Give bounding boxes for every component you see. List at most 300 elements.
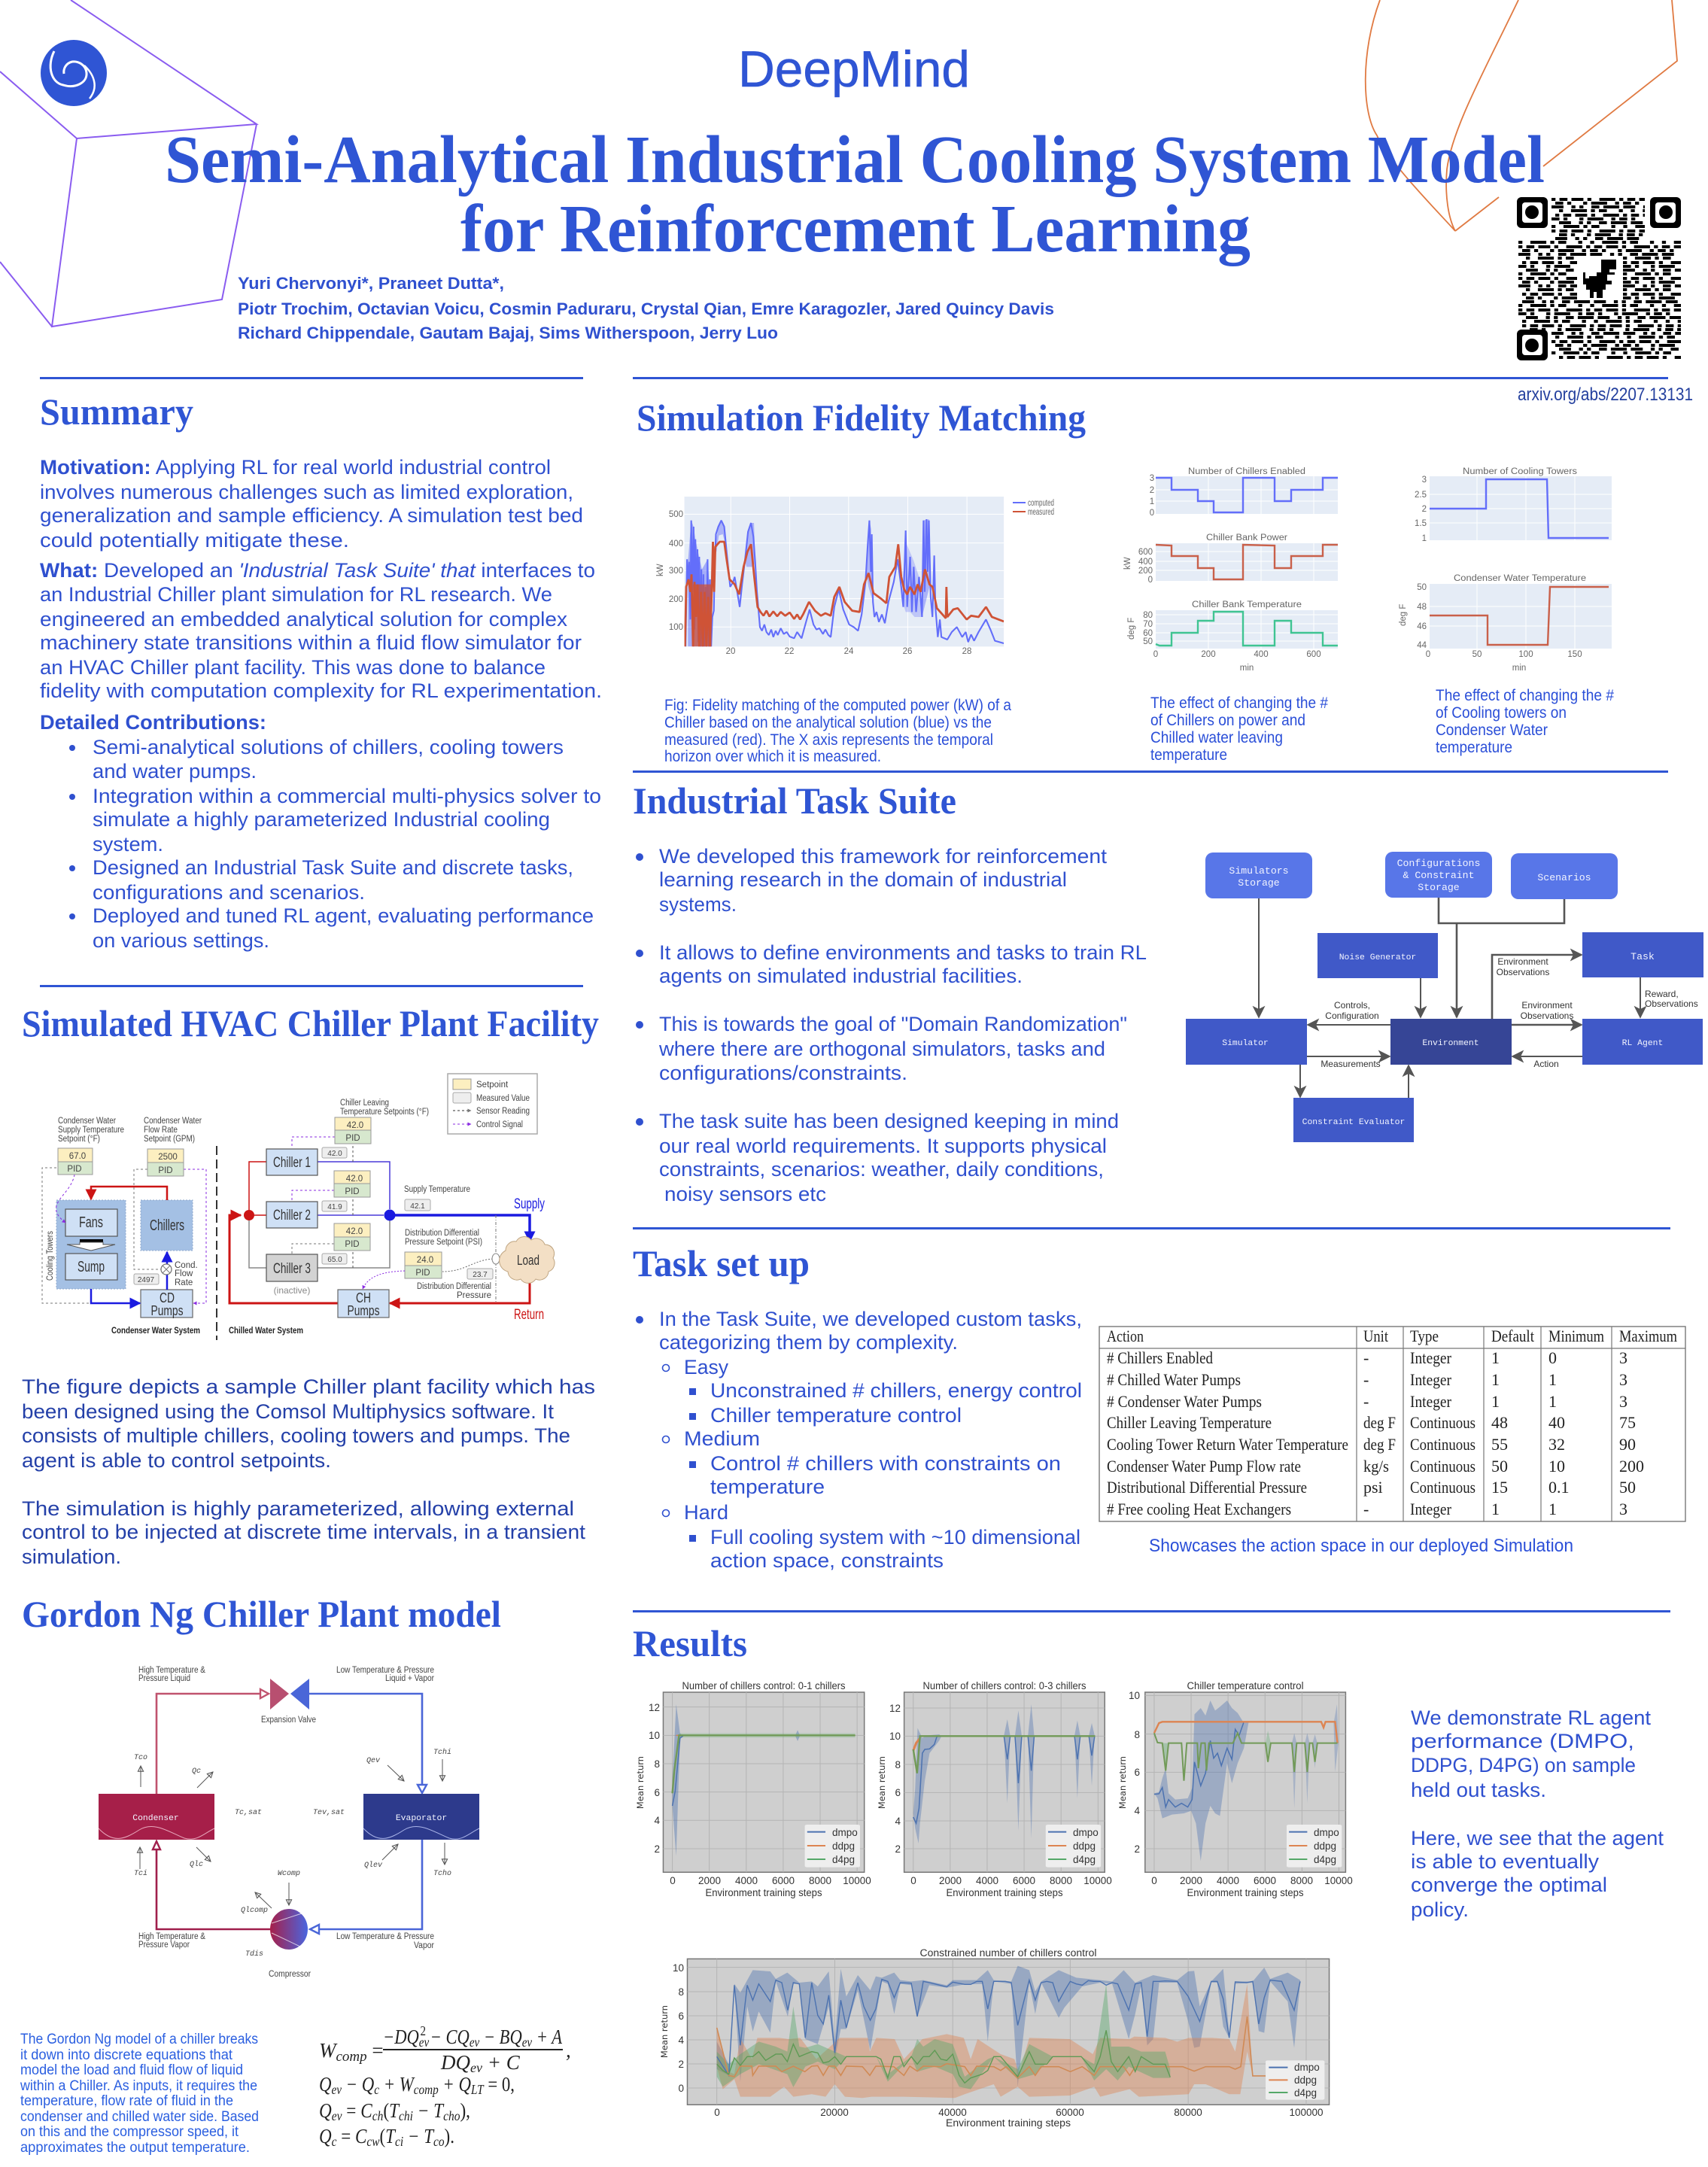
diagram: refrigeration cycle: Tdis	[245, 1950, 263, 1959]
chart: chiller bank temperature: 60	[1143, 629, 1153, 638]
caption: cooling towers effect: Condenser Water	[1436, 722, 1548, 739]
table: action space: # Free cooling Heat Exchangers	[1107, 1500, 1291, 1518]
condenser water system: Setpoint (°F)	[58, 1135, 100, 1144]
chart: constrained number of chillers control: 0	[714, 2107, 720, 2118]
Gordon Ng description: The Gordon Ng model of a chiller breaks	[20, 2032, 258, 2047]
table: action space: 48	[1491, 1413, 1508, 1432]
caption: fidelity chart: horizon over which it is measured.	[664, 748, 881, 765]
equations: cho	[443, 2108, 460, 2123]
table: action space: 1	[1491, 1500, 1500, 1518]
diagram: task suite architecture: Environment	[1422, 1039, 1479, 1048]
chart: chiller bank temperature: 80	[1143, 611, 1153, 620]
chart: chillers control 0-3: 10000	[1083, 1875, 1112, 1886]
equations: 2	[420, 2023, 426, 2038]
decorative purple cube outline	[0, 0, 257, 327]
chart: condenser water temperature: 48	[1417, 603, 1427, 612]
caption: cooling towers effect: of Cooling towers on	[1436, 704, 1567, 722]
chart: computed vs measured power: 26	[903, 647, 912, 656]
table: action space: Integer	[1410, 1348, 1452, 1367]
chilled water system: PID	[415, 1269, 430, 1278]
chart: constrained number of chillers control: 100000	[1289, 2107, 1324, 2118]
table: action space: 40	[1548, 1413, 1565, 1432]
task list: Easy	[684, 1356, 728, 1378]
table: action space: 3	[1619, 1392, 1627, 1411]
condenser water system: PID	[158, 1166, 173, 1175]
chart: chillers control 0-1: 8000	[809, 1875, 831, 1886]
equations: ev	[419, 2035, 429, 2050]
task list: Unconstrained # chillers, energy control	[710, 1379, 1082, 1402]
chiller facility description: control to be injected at discrete time intervals, in a transient	[22, 1521, 586, 1543]
table: action space: kg/s	[1363, 1457, 1389, 1476]
chart: chiller temperature control: 6000	[1254, 1875, 1276, 1886]
chart: chiller bank temperature: 400	[1254, 650, 1269, 659]
chart: chillers control 0-3: 8000	[1050, 1875, 1072, 1886]
chiller facility description: agent is able to control setpoints.	[22, 1449, 331, 1472]
chart: chiller temperature control: 2	[1134, 1843, 1140, 1855]
chart: condenser water temperature: deg F	[1399, 604, 1408, 626]
diagram: refrigeration cycle: Tci	[134, 1869, 147, 1878]
panel: industrial task suite	[633, 770, 1703, 1205]
chilled water system: 42.0	[346, 1227, 363, 1236]
heading: Simulated HVAC: Simulated HVAC Chiller Plant Facility	[22, 1002, 599, 1044]
chart: chillers control 0-1: 2	[654, 1843, 660, 1855]
chart: chillers control 0-1: 12	[649, 1702, 660, 1713]
results description: is able to eventually	[1411, 1850, 1600, 1873]
chart: chiller temperature control: d4pg	[1314, 1854, 1336, 1865]
chilled water system: 24.0	[417, 1256, 433, 1265]
table: action space: 32	[1548, 1435, 1565, 1454]
Gordon Ng description: model the load and fluid flow of liquid	[20, 2062, 243, 2078]
diagram: task suite architecture: Measurements	[1321, 1059, 1381, 1069]
chart: computed vs measured power: 300	[669, 567, 683, 576]
icon: QR code with dinosaur	[1517, 197, 1681, 360]
chart: computed vs measured power: 24	[844, 647, 854, 656]
chart: chillers control 0-1	[635, 1680, 871, 1898]
summary body text: an Industrial Chiller plant simulation for RL research. We	[40, 583, 552, 606]
chilled water system: Chiller 1	[273, 1155, 311, 1171]
caption: cooling towers effect	[1436, 687, 1614, 756]
summary body text: Detailed Contributions:	[40, 711, 266, 734]
equations: + W	[379, 2073, 415, 2096]
equations: ,	[566, 2039, 571, 2062]
task list: categorizing them by complexity.	[659, 1331, 958, 1354]
heading: Gordon Ng: Gordon Ng Chiller Plant model	[22, 1593, 501, 1635]
diagram: refrigeration cycle: Condenser	[132, 1814, 179, 1823]
diagram: task suite architecture: Action	[1533, 1059, 1559, 1069]
chart: chiller temperature control: 2000	[1180, 1875, 1202, 1886]
table: action space: 1	[1548, 1500, 1557, 1518]
chilled water system: Chiller 3	[273, 1261, 311, 1277]
diagram: refrigeration cycle: Tco	[134, 1754, 147, 1762]
chart: constrained number of chillers control: 20000	[820, 2107, 849, 2118]
diagram: task suite architecture: Task	[1631, 951, 1655, 962]
condenser water system: Flow	[175, 1269, 193, 1278]
chart: chiller bank power	[1123, 533, 1338, 585]
chilled water system: Return	[514, 1307, 544, 1323]
equations: Q	[319, 2073, 333, 2096]
diagram: refrigeration cycle: Tcho	[433, 1869, 451, 1878]
condenser water system: Cond.	[175, 1261, 198, 1270]
caption: cooling towers effect: temperature	[1436, 739, 1512, 756]
title	[165, 123, 1545, 266]
chart: number of chillers enabled: 0	[1150, 509, 1154, 518]
chart: chillers control 0-3	[877, 1680, 1112, 1898]
chart: chiller bank power: 600	[1138, 548, 1153, 557]
chart: number of chillers enabled: 2	[1150, 486, 1154, 495]
equations: cw	[366, 2134, 379, 2149]
diagram: task suite architecture: Environment	[1521, 1000, 1573, 1011]
chart: chillers control 0-1: Mean return	[635, 1756, 646, 1809]
equations: =	[367, 2039, 384, 2062]
task list: Control # chillers with constraints on	[710, 1452, 1061, 1475]
equations: ev	[332, 2108, 342, 2123]
caption: chillers effect: Chilled water leaving	[1150, 729, 1283, 746]
chart: chillers control 0-3: Number of chillers control: 0-3 chillers	[922, 1680, 1086, 1691]
table: action space: Distributional Differential Pressure	[1107, 1478, 1307, 1497]
chart: condenser water temperature: 44	[1417, 641, 1427, 650]
chilled water system: 65.0	[327, 1256, 342, 1264]
chart: condenser water temperature: 46	[1417, 622, 1427, 631]
chart: chiller temperature control: 8000	[1290, 1875, 1313, 1886]
diagram: task suite architecture: RL Agent	[1622, 1039, 1663, 1048]
chilled water system: Supply	[514, 1196, 545, 1212]
chart: condenser water temperature: min	[1512, 664, 1526, 673]
equations: + A	[532, 2026, 562, 2048]
chart: chiller temperature control: Chiller temperature control	[1187, 1680, 1303, 1691]
chart: chiller bank temperature: 50	[1143, 637, 1153, 646]
equations: ch	[372, 2108, 383, 2123]
table: action space: 3	[1619, 1348, 1627, 1367]
diagram: refrigeration cycle: Vapor	[414, 1941, 434, 1950]
condenser water system: Chillers	[150, 1217, 184, 1234]
diagram: task suite architecture: Configurations	[1397, 858, 1480, 869]
task suite bullets: agents on simulated industrial facilities.	[659, 965, 1023, 987]
table: action space: Type	[1410, 1327, 1439, 1345]
chart: computed vs measured power: computed	[1028, 499, 1054, 508]
chilled water system	[111, 1099, 555, 1336]
chart: number of chillers enabled	[1150, 467, 1338, 518]
diagram: task suite architecture: Reward,	[1645, 989, 1679, 999]
chart: number of chillers enabled: 3	[1150, 474, 1154, 483]
diagram: refrigeration cycle: Qc	[192, 1767, 201, 1776]
chart: chillers control 0-3: 4000	[976, 1875, 998, 1886]
chart: chiller temperature control: Environment training steps	[1187, 1887, 1304, 1898]
equations: c	[332, 2134, 336, 2149]
summary body text	[40, 456, 602, 952]
equations: co	[433, 2134, 445, 2149]
legend: Setpoint	[476, 1080, 509, 1090]
table: action space: Condenser Water Pump Flow rate	[1107, 1457, 1301, 1476]
chilled water system: 23.7	[473, 1271, 488, 1279]
condenser water system: Fans	[79, 1214, 103, 1231]
caption: fidelity chart: Fig: Fidelity matching of the computed power (kW) of a	[664, 697, 1011, 714]
table: action space: 0	[1548, 1348, 1557, 1367]
equations: ev	[470, 2035, 479, 2050]
chart: chiller bank temperature: 600	[1306, 650, 1321, 659]
chart: chiller bank temperature: 0	[1153, 650, 1158, 659]
authors: Yuri Chervonyi*, Praneet Dutta*,	[238, 274, 504, 293]
summary body text: configurations and scenarios.	[93, 881, 365, 904]
diagram: refrigeration cycle: Expansion Valve	[261, 1716, 316, 1725]
diagram: refrigeration cycle: Compressor	[269, 1970, 311, 1979]
chart: condenser water temperature: 50	[1417, 583, 1427, 592]
chart: chiller bank temperature: min	[1240, 664, 1254, 673]
diagram: refrigeration cycle: Qlc	[190, 1860, 203, 1869]
chart: constrained number of chillers control: 6	[678, 2010, 684, 2022]
Gordon Ng description: it down into discrete equations that	[20, 2047, 233, 2063]
chart: constrained number of chillers control: 8	[678, 1986, 684, 1998]
task suite bullets: The task suite has been designed keeping in mind	[659, 1110, 1119, 1132]
table: action space: 200	[1619, 1457, 1644, 1476]
results description: Here, we see that the agent	[1411, 1827, 1664, 1849]
chart: number of cooling towers: 2	[1422, 505, 1427, 514]
chart: chillers control 0-3: 6	[895, 1787, 901, 1798]
heading: Simulation Fidelity Matching: Simulation Fidelity Matching	[637, 397, 1086, 439]
chart: chiller temperature control: 4000	[1217, 1875, 1239, 1886]
panel: Gordon Ng chiller plant model	[20, 1593, 571, 2156]
chilled water system: 42.0	[346, 1175, 363, 1184]
heading: Task set up: Task set up	[633, 1242, 810, 1284]
diagram: refrigeration cycle: Wcomp	[278, 1870, 300, 1878]
condenser water system	[42, 1117, 206, 1318]
diagram: task suite architecture: Storage	[1238, 877, 1280, 889]
authors: Piotr Trochim, Octavian Voicu, Cosmin Paduraru, Crystal Qian, Emre Karagozler, Jared Quincy Davis	[238, 299, 1054, 318]
table: action space: 0.1	[1548, 1478, 1570, 1497]
chart: computed vs measured power: 500	[669, 510, 683, 519]
equations: −DQ	[383, 2026, 426, 2048]
chilled water system: CH	[356, 1290, 371, 1305]
condenser water system: 2497	[138, 1276, 155, 1284]
heading: Results: Results	[633, 1622, 747, 1664]
results description: performance (DMPO,	[1411, 1730, 1634, 1752]
task suite bullets: It allows to define environments and tasks to train RL	[659, 941, 1147, 964]
chart: constrained number of chillers control: Constrained number of chillers control	[919, 1947, 1097, 1959]
summary body text: and water pumps.	[93, 760, 257, 783]
authors	[238, 274, 1054, 342]
table: action space: # Chillers Enabled	[1107, 1348, 1213, 1367]
chart: computed vs measured power: 22	[785, 647, 794, 656]
chart: chiller bank power: 400	[1138, 558, 1153, 567]
summary body text: system.	[93, 833, 163, 856]
chart: constrained number of chillers control: dmpo	[1294, 2062, 1320, 2073]
equations: =	[336, 2125, 355, 2147]
chart: chiller bank power: 0	[1148, 576, 1153, 585]
diagram: refrigeration cycle: Qlev	[364, 1861, 383, 1870]
chart: chillers control 0-1: dmpo	[832, 1827, 858, 1838]
task suite bullets: We developed this framework for reinforcement	[659, 845, 1108, 868]
chart: chillers control 0-3: 6000	[1013, 1875, 1035, 1886]
diagram: chiller plant schematic	[42, 1074, 555, 1340]
table: action space: -	[1363, 1500, 1369, 1518]
legend: Measured Value	[476, 1094, 530, 1103]
panel: simulation fidelity matching	[633, 377, 1668, 765]
panel: task set up	[633, 1227, 1685, 1572]
chart: constrained number of chillers control: 80000	[1174, 2107, 1202, 2118]
equations: − BQ	[479, 2026, 522, 2048]
condenser water system: CD	[160, 1290, 175, 1305]
chart: chiller temperature control: ddpg	[1314, 1840, 1336, 1852]
summary body text: generalization and sample efficiency. A simulation test bed	[40, 504, 583, 527]
task list: Medium	[684, 1427, 760, 1450]
chart: chillers control 0-3: 2000	[939, 1875, 962, 1886]
chilled water system: Pumps	[348, 1303, 379, 1318]
chart: constrained number of chillers control: 4	[678, 2035, 684, 2046]
condenser water system: Sump	[77, 1259, 105, 1275]
summary body text: machinery state transitions within a fluid flow simulator for	[40, 631, 582, 654]
task suite bullets: systems.	[659, 893, 737, 916]
chart: constrained number of chillers control: d4pg	[1294, 2087, 1317, 2099]
summary body text: Designed an Industrial Task Suite and discrete tasks,	[93, 856, 573, 879]
chilled water system: Distribution Differential	[405, 1229, 479, 1238]
task list: action space, constraints	[710, 1549, 944, 1572]
equations: Q	[319, 2125, 334, 2147]
table: action space: # Chilled Water Pumps	[1107, 1370, 1241, 1389]
equations: − T	[403, 2125, 435, 2147]
condenser water system: Cooling Towers	[44, 1231, 55, 1281]
task suite bullets: where there are orthogonal simulators, tasks and	[658, 1038, 1105, 1060]
chilled water system: 42.0	[347, 1121, 363, 1130]
chart: constrained number of chillers control: 40000	[938, 2107, 967, 2118]
diagram: task suite architecture: Environment	[1497, 956, 1548, 967]
task suite bullets: our real world requirements. It supports physical	[659, 1135, 1107, 1157]
chart: computed vs measured power: 28	[962, 647, 971, 656]
caption: chillers effect: of Chillers on power and	[1150, 712, 1305, 729]
condenser water system: 67.0	[69, 1152, 86, 1161]
chilled water system: 42.1	[410, 1202, 425, 1211]
diagram: refrigeration cycle: High Temperature &	[138, 1666, 205, 1675]
equations: DQ	[441, 2051, 470, 2074]
legend: Control Signal	[476, 1120, 523, 1129]
heading: Industrial Task Suite: Industrial Task Suite	[633, 780, 956, 822]
diagram: refrigeration cycle: Pressure Liquid	[138, 1674, 190, 1683]
equations	[319, 2023, 571, 2149]
equations: comp	[414, 2082, 439, 2097]
table: action space: Continuous	[1410, 1435, 1476, 1454]
diagram: task suite architecture: Storage	[1418, 882, 1460, 893]
chiller facility description: been designed using the Comsol Multiphysics software. It	[22, 1400, 555, 1423]
chart: chillers control 0-1: 8	[654, 1758, 660, 1770]
chart: chiller temperature control: 10	[1129, 1690, 1140, 1701]
summary body text: an HVAC Chiller plant facility. This was done to balance	[40, 656, 546, 679]
title: for Reinforcement Learning	[460, 192, 1251, 266]
chart: constrained number of chillers control: 2	[678, 2059, 684, 2070]
chart: chillers control 0-3: dmpo	[1073, 1827, 1099, 1838]
chilled water system: Pressure	[457, 1291, 491, 1300]
task list: In the Task Suite, we developed custom tasks,	[659, 1308, 1082, 1330]
Gordon Ng description: approximates the output temperature.	[20, 2140, 250, 2156]
chart: number of chillers enabled: 1	[1150, 497, 1154, 506]
equations: T	[385, 2125, 397, 2147]
equations: ev	[470, 2060, 482, 2075]
chilled water system: 42.0	[327, 1150, 342, 1158]
chart: chillers control 0-3: ddpg	[1073, 1840, 1096, 1852]
diagram: refrigeration cycle: Tchi	[433, 1748, 451, 1757]
summary body text: Motivation: Applying RL for real world industrial control	[40, 456, 551, 479]
caption: chillers effect	[1150, 694, 1328, 764]
diagram: refrigeration cycle: Low Temperature & Pressure	[336, 1932, 434, 1941]
legend: Sensor Reading	[476, 1107, 530, 1116]
condenser water system: 2500	[158, 1153, 178, 1162]
chart: computed vs measured power: 200	[669, 595, 683, 604]
table: action space: Integer	[1410, 1392, 1452, 1411]
diagram: task suite architecture: Scenarios	[1537, 872, 1591, 883]
chart: number of cooling towers: 3	[1422, 476, 1427, 485]
table: action space: psi	[1363, 1478, 1383, 1497]
table: action space: Continuous	[1410, 1413, 1476, 1432]
task suite bullets: constraints, scenarios: weather, daily conditions,	[659, 1158, 1104, 1181]
chart: chiller bank power: kW	[1123, 557, 1132, 570]
chilled water system: PID	[345, 1240, 360, 1249]
summary body text: fidelity with computation complexity for RL experimentation.	[40, 679, 602, 702]
table: action space: Maximum	[1619, 1327, 1677, 1345]
table: action space: 1	[1548, 1392, 1557, 1411]
summary body text: Deployed and tuned RL agent, evaluating performance	[93, 904, 594, 927]
table: action space: Chiller Leaving Temperature	[1107, 1413, 1272, 1432]
condenser water system: Condenser Water	[58, 1117, 116, 1126]
chart: chillers control 0-3: 8	[895, 1759, 901, 1770]
task suite bullets	[636, 845, 1147, 1205]
Gordon Ng description: within a Chiller. As inputs, it requires the	[20, 2078, 257, 2094]
chart: chillers control 0-1: ddpg	[832, 1840, 855, 1852]
diagram: refrigeration cycle: Tc,sat	[235, 1809, 262, 1817]
table: action space: -	[1363, 1348, 1369, 1367]
panel: simulated HVAC chiller plant facility	[22, 985, 599, 1568]
chart: chiller temperature control: 6	[1134, 1767, 1140, 1778]
diagram: refrigeration cycle: Low Temperature & Pressure	[336, 1666, 434, 1675]
chart: chillers control 0-3: Environment training steps	[947, 1887, 1063, 1898]
chart: constrained number of chillers control: Mean return	[659, 2005, 670, 2058]
summary body text: could potentially mitigate these.	[40, 529, 349, 552]
chilled water system: PID	[345, 1134, 360, 1143]
condenser water system: Condenser Water	[144, 1117, 202, 1126]
table: action space: -	[1363, 1392, 1369, 1411]
chart: chillers control 0-3: 0	[910, 1875, 916, 1886]
summary body text: Semi-analytical solutions of chillers, cooling towers	[93, 736, 564, 758]
table: action space: Continuous	[1410, 1478, 1476, 1497]
equations: ),	[460, 2099, 470, 2122]
chiller facility description: consists of multiple chillers, cooling towers and pumps. The	[22, 1424, 570, 1447]
DeepMind wordmark: DeepMind	[738, 41, 970, 98]
diagram: refrigeration cycle: Qev	[366, 1757, 381, 1765]
chart: computed vs measured power: 100	[669, 623, 683, 632]
equations: Q	[319, 2099, 334, 2122]
equations: (	[379, 2125, 385, 2147]
chart: constrained number of chillers control: ddpg	[1294, 2074, 1317, 2086]
equations: + Q	[439, 2073, 471, 2096]
chart: number of cooling towers	[1415, 467, 1612, 543]
task suite bullets: This is towards the goal of "Domain Randomization"	[659, 1013, 1127, 1035]
chart: chiller bank power: 200	[1138, 567, 1153, 576]
task suite bullets: noisy sensors etc	[664, 1183, 826, 1205]
decorative orange leaf outline	[1366, 0, 1677, 231]
table: action space: 50	[1619, 1478, 1636, 1497]
chart: chiller bank temperature: Chiller Bank Temperature	[1192, 600, 1302, 609]
chart: condenser water temperature	[1399, 574, 1612, 673]
equations: − CQ	[426, 2026, 470, 2048]
chilled water system: Temperature Setpoints (°F)	[340, 1108, 429, 1117]
diagram: task suite architecture: Observations	[1645, 998, 1698, 1009]
table: action space: # Condenser Water Pumps	[1107, 1392, 1262, 1411]
chart: chiller temperature control: 4	[1134, 1805, 1140, 1816]
chart: chiller bank temperature: 200	[1201, 650, 1216, 659]
equations: ev	[522, 2035, 532, 2050]
chart: condenser water temperature: 0	[1426, 650, 1430, 659]
Gordon Ng description	[20, 2032, 259, 2156]
caption: action space: Showcases the action space in our deployed Simulation	[1149, 1536, 1573, 1556]
equations: + C	[482, 2051, 521, 2074]
table: action space: Default	[1491, 1327, 1534, 1345]
Gordon Ng description: on this and the compressor speed, it	[20, 2124, 239, 2140]
